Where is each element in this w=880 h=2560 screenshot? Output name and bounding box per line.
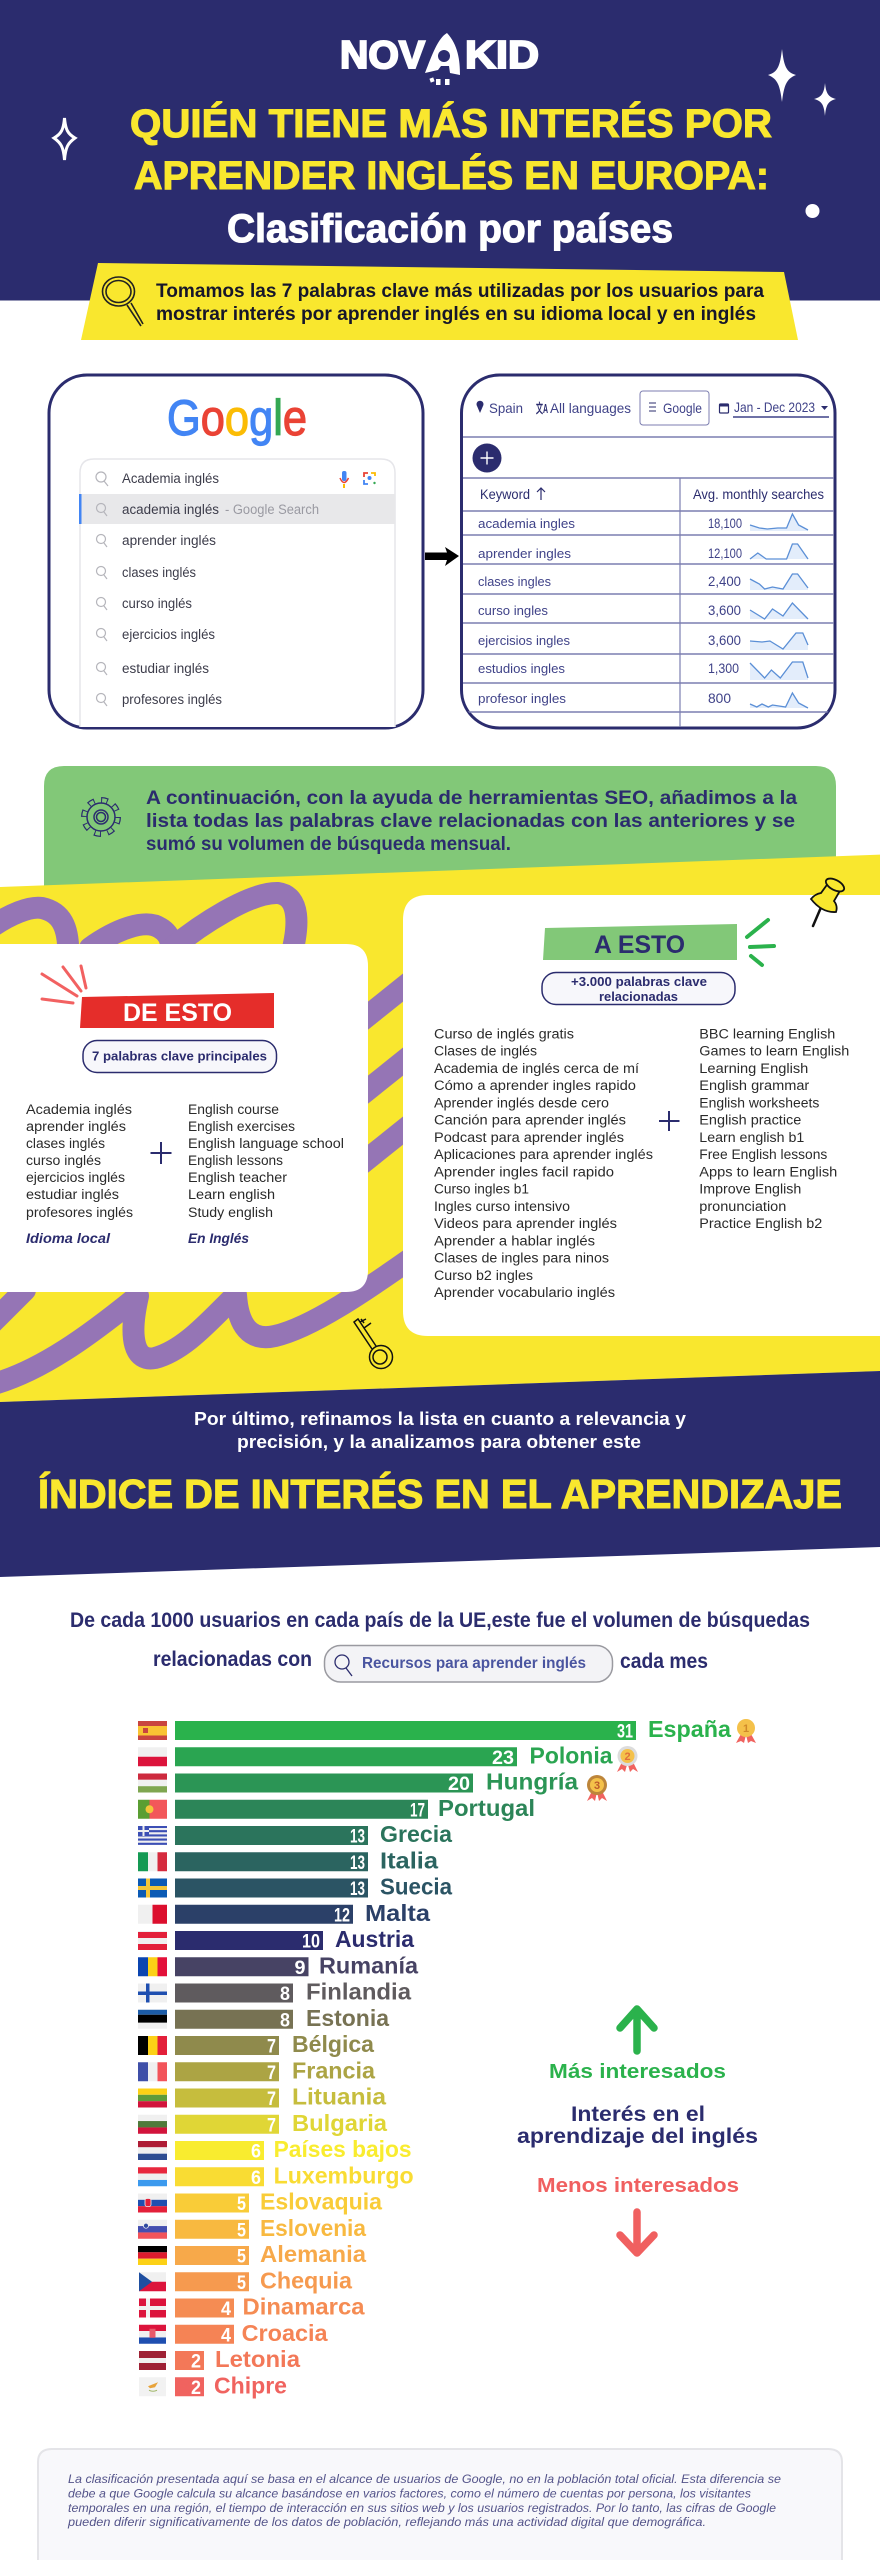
row: Letonia 2: Letonia bbox=[215, 2346, 300, 2372]
row: Malta 12: 12 bbox=[334, 1905, 350, 1926]
row: Eslovaquia 5: Eslovaquia bbox=[260, 2188, 382, 2214]
row: Francia 7: 7 bbox=[267, 2063, 276, 2084]
note text: sumó su volumen de búsqueda mensual. bbox=[146, 834, 511, 855]
row: Letonia 2 bbox=[139, 2346, 300, 2372]
filter bar: Google bbox=[663, 400, 702, 416]
purple scribble bbox=[0, 893, 430, 1385]
pill: 3000 keywords: relacionadas bbox=[599, 989, 678, 1004]
list: Spanish related keywords: Podcast para aprender inglés bbox=[434, 1130, 624, 1145]
keyword table: Avg. monthly searches bbox=[693, 486, 824, 502]
keyword table: 1,300 bbox=[708, 660, 739, 676]
search suggestions box: estudiar inglés bbox=[122, 661, 209, 676]
pill: 3000 keywords bbox=[542, 972, 735, 1004]
heading: a esto: A ESTO bbox=[594, 931, 685, 959]
list: English related keywords: English practice bbox=[699, 1112, 801, 1128]
row: Croacia 4: Croacia bbox=[242, 2320, 328, 2346]
legend: menos interesados: Menos interesados bbox=[537, 2175, 739, 2197]
icon: magnifying glass bbox=[102, 277, 143, 326]
row: Eslovenia 5: Eslovenia bbox=[260, 2215, 366, 2241]
list: Spanish related keywords: Curso de inglés gratis bbox=[434, 1026, 574, 1041]
list: Spanish related keywords: Curso ingles b1 bbox=[434, 1182, 529, 1196]
list: Spanish related keywords: Clases de ingles para ninos bbox=[434, 1250, 609, 1266]
row: Portugal 17: 17 bbox=[410, 1800, 425, 1821]
icon: gold medal: 1 bbox=[743, 1723, 749, 1735]
row: Italia 13: Italia bbox=[380, 1847, 438, 1873]
row: Chequia 5: Chequia bbox=[260, 2267, 352, 2293]
list: English related keywords: English worksheets bbox=[699, 1095, 820, 1110]
list: English related keywords bbox=[699, 1026, 849, 1231]
subtitle: per 1000 users: De cada 1000 usuarios en cada país de la UE,este fue el volumen de búsquedas bbox=[70, 1609, 810, 1632]
row: España 31: España bbox=[648, 1716, 731, 1742]
row: Dinamarca 4: Dinamarca bbox=[242, 2294, 365, 2320]
list: English related keywords: Learning English bbox=[699, 1061, 808, 1076]
list: English keywords: Study english bbox=[188, 1205, 273, 1220]
icon: bronze medal: 3 bbox=[594, 1780, 600, 1792]
search suggestions box: curso inglés bbox=[122, 596, 192, 611]
icon: bronze medal bbox=[587, 1775, 607, 1801]
list: Spanish related keywords: Curso b2 ingles bbox=[434, 1268, 533, 1283]
row: Malta 12 bbox=[138, 1900, 430, 1926]
heading: a esto bbox=[543, 924, 737, 960]
list: local language keywords: clases inglés bbox=[26, 1136, 105, 1151]
list: Spanish related keywords: Videos para aprender inglés bbox=[434, 1216, 617, 1231]
row: Bulgaria 7: 7 bbox=[267, 2115, 276, 2136]
Google logo: Google bbox=[167, 390, 307, 446]
row: Eslovaquia 5 bbox=[138, 2188, 382, 2215]
row: Bélgica 7: Bélgica bbox=[292, 2031, 374, 2057]
search suggestions box: Academia inglés bbox=[122, 471, 219, 486]
row: Hungría 20 bbox=[138, 1768, 578, 1795]
list: English keywords bbox=[188, 1102, 344, 1220]
search pill bbox=[324, 1646, 612, 1682]
list: English keywords: English course bbox=[188, 1102, 279, 1117]
panel: header background bbox=[0, 0, 880, 300]
filter bar: 文A bbox=[536, 401, 548, 416]
caption: en inglés: En Inglés bbox=[188, 1230, 249, 1246]
row: Países bajos 6: 6 bbox=[251, 2142, 261, 2162]
search suggestions box: - Google Search bbox=[225, 502, 319, 517]
list: English keywords: Learn english bbox=[188, 1187, 275, 1202]
icon: small sparkle bbox=[814, 83, 836, 116]
row: Luxemburgo 6: Luxemburgo bbox=[274, 2162, 414, 2188]
list: local language keywords: profesores inglés bbox=[26, 1205, 133, 1220]
icon: dot bbox=[806, 204, 820, 218]
title: Clasificación por países bbox=[227, 207, 673, 251]
legend: más interesados: Más interesados bbox=[549, 2061, 726, 2083]
row: Alemania 5: 5 bbox=[237, 2246, 246, 2268]
list: Spanish related keywords: Academia de inglés cerca de mí bbox=[434, 1061, 639, 1076]
note text: lista todas las palabras clave relacionadas con las anteriores y se bbox=[146, 811, 795, 832]
panel: keyword planner screenshot bbox=[462, 375, 835, 728]
panel: footnote bbox=[38, 2449, 842, 2560]
row: Dinamarca 4 bbox=[139, 2294, 365, 2320]
row: Eslovenia 5 bbox=[138, 2215, 366, 2241]
keyword table: aprender ingles bbox=[478, 546, 572, 561]
row: Lituania 7: Lituania bbox=[292, 2084, 386, 2110]
list: local language keywords bbox=[26, 1102, 133, 1220]
row: Grecia 13 bbox=[138, 1821, 452, 1848]
logo: Novakid: A bbox=[427, 35, 458, 79]
list: Spanish related keywords: Aprender inglés desde cero bbox=[434, 1095, 609, 1110]
plus bbox=[659, 1111, 680, 1131]
keyword table: ejercisios ingles bbox=[478, 633, 570, 648]
text: final intro: Por último, refinamos la lista en cuanto a relevancia y bbox=[194, 1409, 686, 1429]
list: local language keywords: ejercicios inglés bbox=[26, 1170, 125, 1185]
search suggestions box bbox=[79, 459, 395, 727]
icon: silver medal bbox=[617, 1746, 638, 1772]
row: Países bajos 6: Países bajos bbox=[274, 2136, 412, 2162]
filter bar bbox=[476, 391, 829, 425]
row: Suecia 13: Suecia bbox=[380, 1874, 452, 1900]
note text: A continuación, con la ayuda de herramientas SEO, añadimos a la bbox=[146, 788, 797, 809]
list: Spanish related keywords: Aplicaciones para aprender inglés bbox=[434, 1147, 653, 1162]
logo: Novakid: KID bbox=[465, 34, 539, 77]
keyword table: 12,100 bbox=[708, 545, 742, 561]
row: Croacia 4 bbox=[139, 2320, 328, 2346]
row: Grecia 13: 13 bbox=[350, 1826, 365, 1848]
keyword table: clases ingles bbox=[478, 574, 551, 589]
list: Spanish related keywords: Cómo a aprender ingles rapido bbox=[434, 1078, 636, 1093]
row: Luxemburgo 6 bbox=[138, 2162, 414, 2189]
row: Polonia 23 bbox=[138, 1742, 613, 1769]
keyword table: profesor ingles bbox=[478, 691, 567, 706]
search suggestions box: profesores inglés bbox=[122, 692, 222, 707]
list: English keywords: English language school bbox=[188, 1136, 344, 1151]
row: Hungría 20: 20 bbox=[448, 1774, 470, 1795]
list: English related keywords: pronunciation bbox=[699, 1199, 786, 1214]
row: Chipre 2 bbox=[139, 2372, 287, 2399]
panel: navy index banner bbox=[0, 1371, 880, 1577]
list: Spanish related keywords: Clases de inglés bbox=[434, 1044, 537, 1058]
logo: Novakid: NOV bbox=[340, 34, 425, 77]
burst lines bbox=[747, 920, 774, 965]
row: Italia 13 bbox=[138, 1847, 438, 1874]
list: Spanish related keywords: Canción para aprender inglés bbox=[434, 1112, 626, 1128]
keyword table: 3,600 bbox=[708, 602, 741, 618]
list: English related keywords: Apps to learn English bbox=[699, 1164, 837, 1179]
row: Eslovenia 5: 5 bbox=[237, 2220, 246, 2241]
subtitle: per 1000 users bbox=[70, 1609, 810, 1682]
row: Rumanía 9: 9 bbox=[294, 1958, 306, 1979]
legend: axis title: aprendizaje del inglés bbox=[517, 2125, 758, 2148]
row: Países bajos 6 bbox=[138, 2136, 412, 2162]
intro text: Tomamos las 7 palabras clave más utilizadas por los usuarios para bbox=[156, 281, 764, 302]
list: local language keywords: estudiar inglés bbox=[26, 1187, 119, 1202]
row: Bélgica 7 bbox=[138, 2031, 374, 2058]
keyword table: academia ingles bbox=[478, 516, 576, 531]
icon: silver medal: 2 bbox=[624, 1751, 631, 1763]
pill: 7 keywords: 7 palabras clave principales bbox=[92, 1048, 267, 1064]
intro text: mostrar interés por aprender inglés en su idioma local y en inglés bbox=[156, 304, 756, 325]
text: final intro: precisión, y la analizamos para obtener este bbox=[237, 1432, 641, 1452]
add button bbox=[472, 444, 502, 472]
legend: axis title: Interés en el bbox=[571, 2103, 705, 2126]
list: local language keywords: aprender inglés bbox=[26, 1119, 126, 1134]
list: English keywords: English teacher bbox=[188, 1170, 288, 1185]
row: Finlandia 8 bbox=[138, 1978, 411, 2005]
row: Francia 7: Francia bbox=[292, 2057, 375, 2083]
search suggestions box: aprender inglés bbox=[122, 533, 216, 548]
panel: yellow intro banner bbox=[81, 263, 798, 340]
row: Suecia 13: 13 bbox=[350, 1879, 365, 1900]
row: Bulgaria 7 bbox=[138, 2110, 387, 2136]
row: Chipre 2: 2 bbox=[191, 2378, 201, 2399]
panel: footnote: temporales en una región, el tiempo de interacción en sus sitios web y los usuarios registrados. Por lo tanto, las cifras de Google bbox=[68, 2501, 776, 2515]
logo: Novakid bbox=[340, 33, 539, 85]
row: Hungría 20: Hungría bbox=[486, 1768, 578, 1794]
row: Rumanía 9: Rumanía bbox=[319, 1952, 418, 1978]
row: España 31 bbox=[138, 1716, 731, 1742]
row: Luxemburgo 6: 6 bbox=[251, 2168, 261, 2189]
row: Portugal 17 bbox=[138, 1795, 535, 1821]
row: Malta 12: Malta bbox=[365, 1900, 430, 1926]
row: Alemania 5 bbox=[138, 2241, 366, 2268]
keyword table: estudios ingles bbox=[478, 661, 566, 676]
row: Chequia 5: 5 bbox=[237, 2273, 246, 2294]
panel: Google search screenshot bbox=[49, 375, 423, 728]
row: Chipre 2: Chipre bbox=[214, 2372, 287, 2398]
row: Polonia 23: 23 bbox=[492, 1748, 514, 1769]
icon: big sparkle bbox=[768, 49, 796, 102]
text: final intro bbox=[194, 1409, 686, 1452]
panel: green SEO note bbox=[44, 766, 836, 900]
row: Polonia 23: Polonia bbox=[530, 1742, 613, 1768]
note text bbox=[146, 788, 797, 855]
pill: 7 keywords bbox=[83, 1040, 276, 1072]
row: Letonia 2: 2 bbox=[191, 2352, 201, 2372]
list: Spanish related keywords: Ingles curso intensivo bbox=[434, 1199, 570, 1214]
row: Chequia 5 bbox=[139, 2267, 352, 2294]
row: Suecia 13 bbox=[138, 1874, 452, 1900]
search pill: Recursos para aprender inglés bbox=[362, 1655, 586, 1672]
panel: footnote: La clasificación presentada aquí se basa en el alcance de usuarios de Google, no en la población total oficial. Esta diferencia se bbox=[68, 2472, 781, 2486]
row: Bélgica 7: 7 bbox=[267, 2036, 276, 2058]
row: Estonia 8 bbox=[138, 2005, 389, 2031]
keyword table: 3,600 bbox=[708, 632, 741, 648]
search suggestions box: academia inglés bbox=[122, 502, 219, 517]
row: Croacia 4: 4 bbox=[221, 2325, 231, 2346]
list: Spanish related keywords: Aprender ingles facil rapido bbox=[434, 1164, 614, 1179]
keyword table: 800 bbox=[708, 690, 731, 706]
row: Lituania 7 bbox=[138, 2084, 386, 2110]
list: English related keywords: English grammar bbox=[699, 1078, 810, 1093]
row: Portugal 17: Portugal bbox=[438, 1795, 535, 1821]
list: English keywords: English exercises bbox=[188, 1119, 295, 1134]
row: Rumanía 9 bbox=[138, 1952, 418, 1979]
icon: outlined sparkle bbox=[54, 118, 75, 160]
row: Austria 10: 10 bbox=[302, 1932, 320, 1952]
filter bar: Spain bbox=[489, 400, 523, 416]
subtitle: per 1000 users: cada mes bbox=[620, 1650, 708, 1673]
panel: a esto bbox=[403, 895, 880, 1336]
row: Austria 10 bbox=[138, 1926, 414, 1952]
row: Estonia 8: 8 bbox=[280, 2010, 290, 2031]
title: QUIÉN TIENE MÁS INTERÉS POR bbox=[130, 101, 772, 146]
list: English keywords: English lessons bbox=[188, 1153, 283, 1168]
keyword table: Keyword bbox=[480, 486, 530, 502]
caption: idioma local: Idioma local bbox=[26, 1230, 111, 1246]
row: Francia 7 bbox=[138, 2057, 375, 2084]
row: Finlandia 8: 8 bbox=[280, 1984, 290, 2005]
list: English related keywords: Games to learn English bbox=[699, 1044, 849, 1058]
heading: de esto: DE ESTO bbox=[123, 999, 232, 1027]
list: Spanish related keywords: Aprender a hablar inglés bbox=[434, 1233, 595, 1248]
subtitle: per 1000 users: relacionadas con bbox=[153, 1648, 312, 1671]
list: Spanish related keywords bbox=[434, 1026, 653, 1300]
title bbox=[130, 101, 772, 251]
sparklines bbox=[750, 514, 808, 708]
list: local language keywords: Academia inglés bbox=[26, 1102, 132, 1117]
list: local language keywords: curso inglés bbox=[26, 1153, 101, 1168]
icon: microphone bbox=[340, 471, 348, 488]
filter bar: All languages bbox=[550, 400, 631, 416]
icon: lens bbox=[364, 473, 376, 484]
icon: key bbox=[354, 1319, 392, 1368]
arrow: search to keyword planner bbox=[425, 547, 459, 566]
list: English related keywords: BBC learning English bbox=[699, 1026, 835, 1041]
row: Austria 10: Austria bbox=[335, 1926, 414, 1952]
intro text bbox=[156, 281, 764, 325]
keyword table: 18,100 bbox=[708, 515, 742, 531]
row: Dinamarca 4: 4 bbox=[221, 2299, 231, 2320]
row: España 31: 31 bbox=[617, 1722, 633, 1742]
icon: gear bbox=[84, 800, 118, 834]
filter bar: Jan - Dec 2023 bbox=[734, 399, 815, 415]
row: Estonia 8: Estonia bbox=[306, 2005, 389, 2031]
legend: axis title bbox=[517, 2103, 758, 2148]
arrow: up, more interested bbox=[620, 2009, 654, 2051]
heading: de esto bbox=[80, 993, 274, 1028]
list: Spanish related keywords: Aprender vocabulario inglés bbox=[434, 1285, 615, 1300]
panel: de esto bbox=[0, 944, 368, 1292]
title: APRENDER INGLÉS EN EUROPA: bbox=[134, 153, 769, 198]
row: Finlandia 8: Finlandia bbox=[306, 1978, 411, 2004]
icon: gold medal bbox=[736, 1719, 756, 1743]
search suggestions box: ejercicios inglés bbox=[122, 627, 215, 642]
list: English related keywords: Practice English b2 bbox=[699, 1216, 822, 1231]
row: Italia 13: 13 bbox=[350, 1853, 365, 1874]
heading: index: ÍNDICE DE INTERÉS EN EL APRENDIZAJE bbox=[38, 1471, 842, 1517]
panel: footnote: debe a que Google calcula su alcance basándose en varios factores, como el número de cuentas por persona, los visitantes bbox=[68, 2486, 751, 2500]
pill: 3000 keywords: +3.000 palabras clave bbox=[571, 974, 707, 989]
icon: pushpin bbox=[811, 876, 846, 926]
row: Eslovaquia 5: 5 bbox=[237, 2194, 246, 2215]
keyword table: 2,400 bbox=[708, 573, 741, 589]
row: Lituania 7: 7 bbox=[267, 2089, 276, 2110]
keyword table: curso ingles bbox=[478, 603, 548, 618]
row: Bulgaria 7: Bulgaria bbox=[292, 2110, 387, 2136]
plus bbox=[150, 1142, 172, 1164]
keyword table bbox=[463, 437, 834, 727]
list: English related keywords: Free English lessons bbox=[699, 1147, 828, 1162]
arrow: down, less interested bbox=[620, 2212, 654, 2253]
panel: yellow comparison background bbox=[0, 855, 880, 1402]
bar chart: interest index by country bbox=[138, 1716, 731, 2399]
burst lines bbox=[42, 966, 86, 1003]
row: Grecia 13: Grecia bbox=[380, 1821, 452, 1847]
list: English related keywords: Improve English bbox=[699, 1182, 801, 1196]
panel: footnote: pueden diferir significativamente de los datos de población, reflejando más una actividad digital que demográfica. bbox=[67, 2515, 706, 2529]
search suggestions box: clases inglés bbox=[122, 565, 196, 580]
list: English related keywords: Learn english b1 bbox=[699, 1130, 804, 1145]
row: Alemania 5: Alemania bbox=[260, 2241, 366, 2267]
